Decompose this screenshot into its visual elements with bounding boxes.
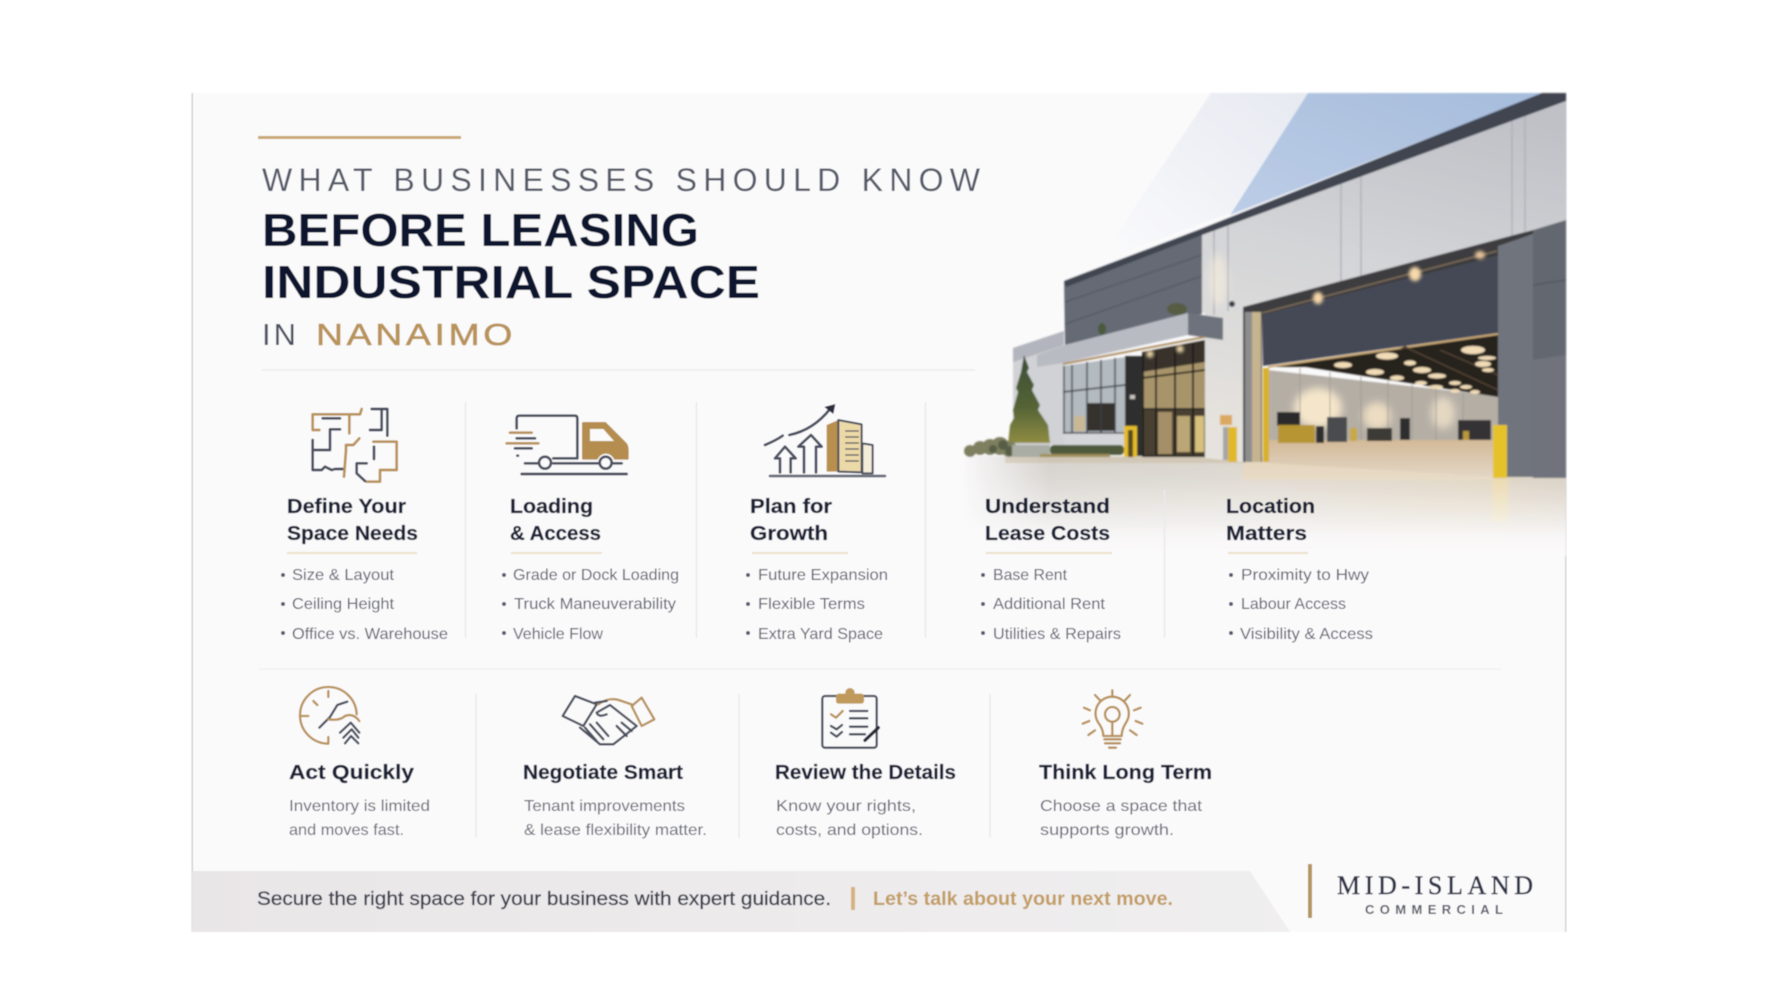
bullet list: Future Expansion xyxy=(758,567,888,584)
heading: Understand xyxy=(985,496,1110,518)
door lights xyxy=(1313,251,1485,304)
column dividers xyxy=(466,402,1164,638)
icon: growth building xyxy=(765,404,885,476)
rolled door xyxy=(1262,256,1498,366)
description xyxy=(776,798,923,839)
logo: Mid-Island Commercial: MID-ISLAND xyxy=(1337,871,1533,900)
description: Inventory is limited xyxy=(289,798,430,815)
yellow door strip xyxy=(1263,368,1269,462)
heading: Space Needs xyxy=(287,523,418,545)
heading: & Access xyxy=(510,523,601,545)
left window xyxy=(1063,357,1125,433)
description: Choose a space that xyxy=(1040,798,1203,815)
main light wall xyxy=(1202,100,1566,462)
panel background xyxy=(192,93,1566,932)
logo: Mid-Island Commercial xyxy=(1308,864,1533,918)
bullet list: Labour Access xyxy=(1241,596,1346,613)
poster panel xyxy=(192,93,1566,932)
location line: IN xyxy=(262,317,299,352)
bullet list: Office vs. Warehouse xyxy=(292,626,448,643)
heading xyxy=(287,496,418,545)
call-to-action bar xyxy=(192,871,1290,932)
bullet list xyxy=(1229,567,1373,643)
cta message: Secure the right space for your business with expert guidance. xyxy=(257,889,831,910)
tip: act quickly xyxy=(289,687,430,839)
roof band xyxy=(1064,93,1566,287)
warehouse interior xyxy=(1268,333,1498,477)
garage door frame xyxy=(1243,230,1533,462)
left low wall xyxy=(1013,331,1064,445)
description: supports growth. xyxy=(1040,822,1174,839)
heading xyxy=(750,496,832,545)
heading: Growth xyxy=(750,523,828,545)
bullet list xyxy=(502,567,679,643)
card: loading and access xyxy=(502,416,679,643)
bullet list: Truck Maneuverability xyxy=(514,596,676,613)
tree and shrubs xyxy=(964,303,1187,457)
right dark column xyxy=(1497,220,1566,478)
bullet list: Vehicle Flow xyxy=(513,626,603,643)
bullet list: Extra Yard Space xyxy=(758,626,883,643)
card: plan for growth xyxy=(746,404,888,643)
heading: Loading xyxy=(510,496,593,518)
sky xyxy=(1098,93,1545,262)
bullet list: Utilities & Repairs xyxy=(993,626,1121,643)
icon: clipboard xyxy=(822,688,878,748)
heading xyxy=(510,496,601,545)
entry doors xyxy=(1125,340,1205,457)
card: define your space needs xyxy=(281,409,448,643)
bullet list xyxy=(981,567,1121,643)
main title: BEFORE LEASING xyxy=(262,204,699,256)
heading: Act Quickly xyxy=(289,762,415,784)
heading: Negotiate Smart xyxy=(523,762,683,784)
icon: light bulb xyxy=(1083,690,1142,748)
canopy xyxy=(1037,313,1223,367)
location line xyxy=(262,317,516,352)
kicker: WHAT BUSINESSES SHOULD KNOW xyxy=(262,162,981,198)
card: location matters xyxy=(1226,496,1373,643)
description xyxy=(524,798,707,839)
bullet list xyxy=(281,567,448,643)
tip: review the details xyxy=(775,688,956,839)
bullet list xyxy=(746,567,888,643)
heading: Define Your xyxy=(287,496,406,518)
heading xyxy=(1226,496,1315,545)
description: Know your rights, xyxy=(776,798,916,815)
heading: Location xyxy=(1226,496,1315,518)
bullet list: Additional Rent xyxy=(993,596,1106,613)
accent rule xyxy=(258,136,461,139)
bullet list: Proximity to Hwy xyxy=(1241,567,1369,584)
heading: Review the Details xyxy=(775,762,956,784)
bullet list: Size & Layout xyxy=(292,567,395,584)
description xyxy=(1040,798,1203,839)
ground xyxy=(960,456,1566,556)
bullet list: Visibility & Access xyxy=(1240,626,1373,643)
title block xyxy=(262,162,981,352)
bullet list: Flexible Terms xyxy=(758,596,865,613)
tip: think long term xyxy=(1039,690,1212,839)
icon: handshake xyxy=(563,696,654,744)
icon: clock xyxy=(300,687,359,744)
cta link: Let’s talk about your next move. xyxy=(873,889,1173,910)
heading: Plan for xyxy=(750,496,832,518)
icon: floor plan xyxy=(313,409,397,482)
heading xyxy=(985,496,1110,545)
location line: NANAIMO xyxy=(316,317,516,352)
photo: industrial building xyxy=(960,93,1566,556)
description xyxy=(289,798,430,839)
heading: Lease Costs xyxy=(985,523,1110,545)
bollards xyxy=(1124,415,1507,478)
logo: Mid-Island Commercial: COMMERCIAL xyxy=(1365,902,1503,917)
tip: negotiate smart xyxy=(523,696,707,839)
main title: INDUSTRIAL SPACE xyxy=(262,256,760,308)
card: understand lease costs xyxy=(981,496,1121,643)
heading: Think Long Term xyxy=(1039,762,1212,784)
main title xyxy=(262,204,760,308)
bullet list: Base Rent xyxy=(993,567,1068,584)
icon: delivery truck xyxy=(507,416,627,474)
heading: Matters xyxy=(1226,523,1307,545)
description: & lease flexibility matter. xyxy=(524,822,707,839)
description: Tenant improvements xyxy=(524,798,685,815)
bullet list: Grade or Dock Loading xyxy=(513,567,679,584)
description: costs, and options. xyxy=(776,822,923,839)
upper dark block xyxy=(1064,233,1202,345)
description: and moves fast. xyxy=(289,822,404,839)
bullet list: Ceiling Height xyxy=(292,596,395,613)
